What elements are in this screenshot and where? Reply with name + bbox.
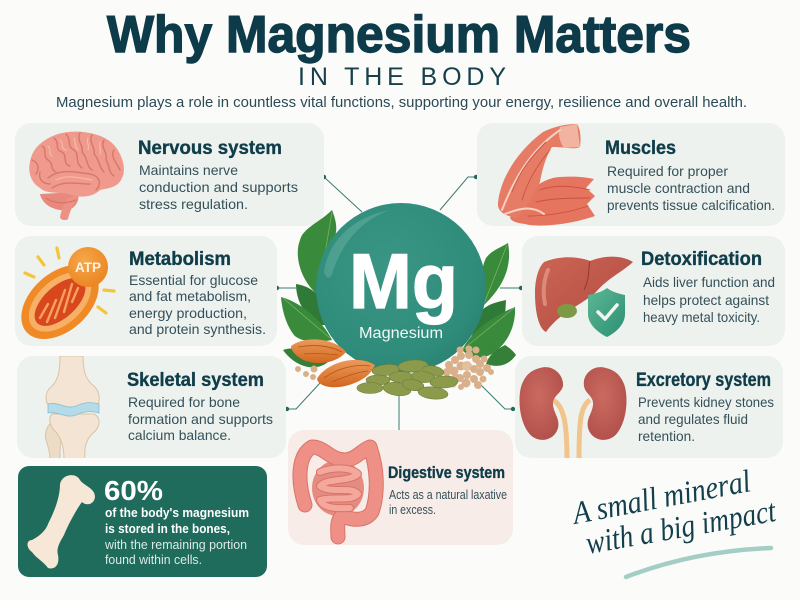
description: Required for bone [128, 394, 240, 410]
description: and fat metabolism, [129, 288, 251, 304]
panel: excretory system [515, 356, 783, 460]
icon: flexed arm muscle [498, 124, 595, 226]
underline stroke [626, 548, 771, 577]
pumpkin seeds [357, 359, 458, 401]
leaves [281, 210, 516, 367]
panel: digestive system [288, 430, 513, 545]
heading: Muscles [605, 138, 676, 159]
panel: detoxification [522, 236, 785, 346]
description: helps protect against [643, 292, 769, 308]
description: and regulates fluid [638, 411, 748, 427]
description: heavy metal toxicity. [643, 309, 760, 325]
panel: muscles [477, 123, 785, 226]
description: and protein synthesis. [129, 321, 266, 337]
seeds: lentils [295, 346, 494, 390]
icon: liver with shield [535, 257, 633, 337]
description: conduction and supports [139, 179, 298, 195]
panel: nervous system [15, 123, 324, 226]
description: Required for proper [607, 163, 728, 179]
description: retention. [638, 428, 695, 444]
description: Maintains nerve [139, 162, 238, 178]
heading: Nervous system [138, 138, 282, 159]
heading: Excretory system [636, 370, 771, 391]
callout text: found within cells. [105, 552, 202, 567]
description: stress regulation. [139, 196, 248, 212]
description: Prevents kidney stones [638, 394, 774, 410]
handwritten tagline [568, 462, 779, 577]
panel: metabolism [7, 236, 277, 354]
almonds [291, 339, 375, 387]
panel: skeletal system [17, 356, 286, 460]
heading: Metabolism [129, 249, 231, 270]
callout text: of the body's magnesium [105, 505, 249, 520]
subtitle: in the body: IN THE BODY [298, 63, 506, 91]
description: formation and supports [128, 411, 273, 427]
description: Essential for glucose [129, 272, 258, 288]
heading: Detoxification [641, 249, 762, 270]
icon: brain [29, 132, 124, 220]
description: in excess. [389, 503, 436, 517]
callout text: is stored in the bones, [105, 521, 230, 536]
icon: mitochondrion with ATP: ATP [75, 260, 101, 275]
callout text: with the remaining portion [104, 537, 247, 552]
icon: intestines [300, 447, 376, 537]
icon: knee joint [45, 356, 99, 460]
Mg symbol: Mg [349, 237, 458, 325]
handwritten tagline: A small mineral [568, 462, 753, 531]
Magnesium label: Magnesium [359, 325, 443, 342]
heading: Digestive system [388, 463, 505, 482]
panel: 60% callout [18, 466, 267, 577]
description: muscle contraction and [607, 180, 750, 196]
description: Acts as a natural laxative [389, 488, 507, 502]
title: Why Magnesium Matters [107, 6, 691, 64]
intro text: Magnesium plays a role in countless vital functions, supporting your energy, resilience and overall health. [56, 94, 747, 111]
description: energy production, [129, 305, 247, 321]
description: prevents tissue calcification. [607, 197, 775, 213]
statistic: 60% [104, 475, 163, 506]
icon: mitochondrion with ATP [7, 247, 114, 354]
magnesium sphere [316, 203, 486, 373]
icon: kidneys [520, 367, 626, 460]
description: Aids liver function and [643, 274, 775, 290]
icon: bone [28, 475, 95, 568]
central magnesium illustration [281, 203, 516, 401]
description: calcium balance. [128, 427, 231, 443]
heading: Skeletal system [127, 370, 264, 391]
connector lines [275, 175, 523, 430]
